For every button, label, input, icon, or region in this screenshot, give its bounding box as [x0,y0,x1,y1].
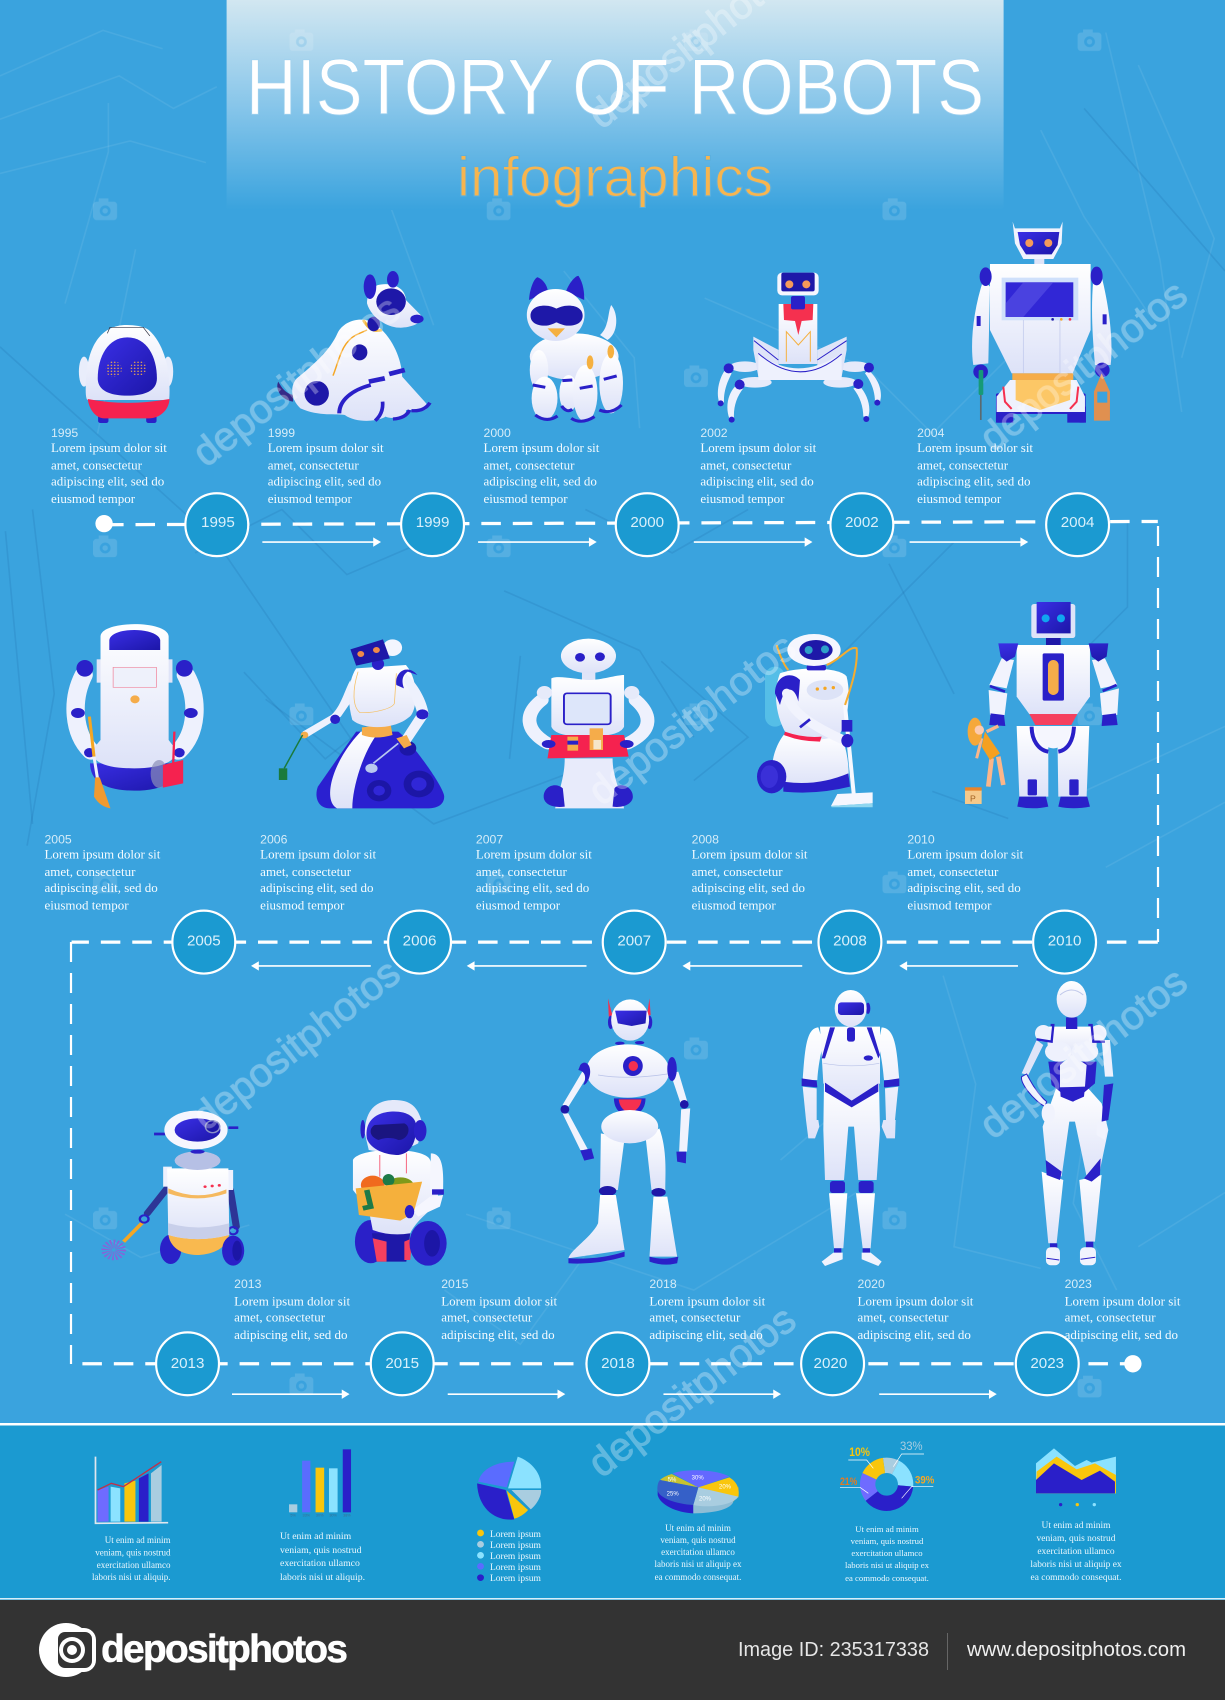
node 1995 [185,493,248,556]
chart: donut [840,1439,934,1506]
node 2002: 2002 [845,514,879,531]
chart: column bars [289,1449,351,1518]
text: chart 2: laboris nisi ut aliquip. [280,1572,365,1583]
caption 2018 [649,1277,766,1342]
caption 2000: adipiscing elit, sed do [484,474,597,489]
caption 2000: eiusmod tempor [484,491,568,506]
website: www.depositphotos.com [966,1639,1186,1661]
chart: donut: 39% [915,1474,934,1486]
watermarks: depositphotos [971,272,1195,460]
text: chart 6: ea commodo consequat. [1031,1573,1121,1583]
robot 2002: spider [718,273,881,423]
robot 2008: mop [757,634,873,807]
caption 2015: 2015 [441,1277,469,1291]
text: chart 6 [1030,1521,1122,1583]
caption 2018: amet, consectetur [649,1310,741,1325]
watermarks: depositphotos [580,1297,804,1486]
image id: Image ID: 235317338 [738,1639,929,1661]
text: chart 6: exercitation ullamco [1037,1547,1115,1557]
caption 2007: eiusmod tempor [476,898,561,913]
caption 2010: amet, consectetur [907,864,999,879]
text: chart 5: exercitation ullamco [851,1548,923,1558]
chart: column bars: 30% [316,1514,324,1518]
caption 2023 [1065,1277,1181,1342]
caption 1995 [51,426,167,506]
caption 2020: adipiscing elit, sed do [858,1327,971,1342]
node 2004: 2004 [1061,514,1094,531]
caption 2000: 2000 [484,426,511,440]
node 2000: 2000 [630,514,664,531]
caption 2007 [476,832,592,913]
caption 2010: adipiscing elit, sed do [907,880,1021,895]
text: chart 4 [654,1523,742,1582]
node 2020: 2020 [814,1355,847,1372]
watermarks: depositphotos [184,287,408,475]
caption 2000 [484,426,600,506]
node 2007: 2007 [617,932,651,949]
caption 2018: adipiscing elit, sed do [649,1327,763,1342]
watermarks [184,0,1195,1486]
caption 2007: adipiscing elit, sed do [476,880,589,895]
chart: column bars: 38% [343,1514,351,1518]
node 2023: 2023 [1030,1355,1064,1372]
caption 2008: adipiscing elit, sed do [692,880,805,895]
text: chart 6: laboris nisi ut aliquip ex [1030,1560,1122,1570]
text: chart 4: veniam, quis nostrud [660,1535,736,1545]
timeline: row 3 [82,1332,1142,1397]
text: chart 4: exercitation ullamco [661,1547,735,1557]
watermarks: depositphotos [184,950,408,1139]
caption 2007: amet, consectetur [476,864,568,879]
caption 2005 [44,832,161,913]
caption 2004 [917,426,1033,506]
caption 2004: adipiscing elit, sed do [917,474,1031,489]
timeline: row 1 [95,493,1158,556]
caption 2018: Lorem ipsum dolor sit [649,1293,766,1308]
text: chart 4: laboris nisi ut aliquip ex [654,1559,742,1569]
caption 2010: eiusmod tempor [907,898,992,913]
node 2006 [388,911,451,974]
caption 1995: Lorem ipsum dolor sit [51,440,167,455]
caption 1999: adipiscing elit, sed do [268,474,381,489]
node 2013: 2013 [171,1355,204,1372]
caption 2002: eiusmod tempor [700,491,785,506]
chart: 3D pie: 30% [692,1475,704,1481]
chart: area [1036,1448,1116,1506]
caption 2023: 2023 [1065,1277,1092,1291]
node 2018 [586,1332,649,1395]
robot 2004: worker [972,222,1112,423]
chart: pie with legend [477,1457,541,1581]
captions row 3 [234,1277,1181,1342]
text: chart 5: laboris nisi ut aliquip ex [845,1560,930,1570]
text: chart 5: ea commodo consequat. [845,1573,929,1583]
node 1995: 1995 [201,514,235,531]
node 1999 [401,493,464,556]
node 2000 [616,493,679,556]
robot 2020: android [802,990,899,1266]
robot 2006: tracked [279,639,444,808]
subtitle: infographics [457,145,773,208]
chart: column bars: 5% [290,1514,297,1518]
caption 2006: Lorem ipsum dolor sit [260,847,376,862]
caption 2013: amet, consectetur [234,1310,326,1325]
legend: pie: Lorem ipsum [490,1574,542,1584]
robot 2018: humanoid [561,998,690,1265]
caption 2004: eiusmod tempor [917,491,1002,506]
chart: donut: 33% [900,1439,923,1453]
text: chart 4: ea commodo consequat. [655,1572,741,1582]
title: HISTORY OF ROBOTS [246,42,984,131]
robot 1999: dog [277,271,430,421]
timeline: connector left [70,942,72,1364]
node 2002 [830,493,893,556]
caption 2008 [692,832,808,913]
text: chart 5: Ut enim ad minim [855,1524,919,1534]
panel: header gradient [227,0,1004,210]
footer bar [0,1600,1225,1700]
caption 2005: Lorem ipsum dolor sit [44,847,161,862]
text: chart 2: exercitation ullamco [280,1558,360,1569]
caption 2015: adipiscing elit, sed do [441,1327,555,1342]
node 2006: 2006 [403,932,436,949]
caption 2005: eiusmod tempor [44,898,129,913]
chart: 3D pie: 25% [667,1492,679,1498]
caption 2004: amet, consectetur [917,457,1009,472]
text: chart 1: exercitation ullamco [97,1560,171,1570]
caption 2005: 2005 [44,832,72,846]
legend: pie: Lorem ipsum [490,1541,542,1551]
caption 2023: Lorem ipsum dolor sit [1065,1293,1181,1308]
arrows row 3 [232,1391,995,1397]
caption 2015: Lorem ipsum dolor sit [441,1293,558,1308]
text: chart 4: Ut enim ad minim [665,1523,731,1533]
logo wordmark: depositphotos [101,1628,348,1671]
caption 2002: 2002 [700,426,728,440]
caption 2013 [234,1277,350,1342]
caption 2002: amet, consectetur [700,457,792,472]
legend: pie [490,1530,542,1584]
caption 2008: 2008 [692,832,719,846]
panel: bottom charts [0,1423,1225,1600]
text: chart 2 [280,1531,365,1583]
caption 2006: amet, consectetur [260,864,352,879]
robot 1995 [79,325,173,423]
node 1999: 1999 [416,514,449,531]
node 2015 [371,1332,434,1395]
robot 2010: tall with girl [965,602,1119,808]
legend: pie: Lorem ipsum [490,1563,542,1573]
text: chart 5 [845,1524,930,1583]
caption 1995: 1995 [51,426,78,440]
text: chart 1: Ut enim ad minim [105,1535,170,1545]
legend: pie: Lorem ipsum [490,1552,542,1562]
caption 2007: 2007 [476,832,503,846]
chart: donut: 21% [840,1476,857,1488]
node 2005 [172,911,235,974]
caption 1995: amet, consectetur [51,457,143,472]
timeline: connector right [1157,526,1159,942]
text: chart 2: veniam, quis nostrud [280,1545,362,1556]
caption 2004: 2004 [917,426,945,440]
caption 2023: amet, consectetur [1065,1310,1156,1325]
caption 2010: 2010 [907,832,935,846]
node 2020 [801,1332,864,1395]
text: chart 5: veniam, quis nostrud [851,1536,924,1546]
caption 2007: Lorem ipsum dolor sit [476,847,592,862]
chart: donut: 10% [849,1445,870,1459]
node 2007 [603,911,666,974]
caption 2005: amet, consectetur [44,864,136,879]
caption 2000: Lorem ipsum dolor sit [484,440,600,455]
robot 2005: cleaner [71,624,198,808]
text: chart 1 [92,1535,171,1582]
caption 2010: Lorem ipsum dolor sit [907,847,1024,862]
caption 2002: adipiscing elit, sed do [700,474,814,489]
caption 2018: 2018 [649,1277,677,1291]
node 2018: 2018 [601,1355,635,1372]
watermarks: depositphotos [971,959,1195,1148]
caption 2020: 2020 [858,1277,885,1291]
captions row 2 [44,832,1024,913]
node 2010: 2010 [1048,932,1081,949]
caption 2023: adipiscing elit, sed do [1065,1327,1178,1342]
icon: camera logo [39,1623,96,1677]
caption 2013: Lorem ipsum dolor sit [234,1293,350,1308]
caption 1999: 1999 [268,426,295,440]
caption 2006 [260,832,376,913]
chart: 3D pie: 20% [719,1484,732,1490]
robot 2007: waiter [529,639,648,808]
node 2004 [1046,493,1109,556]
caption 2015 [441,1277,558,1342]
caption 2006: 2006 [260,832,288,846]
caption 2004: Lorem ipsum dolor sit [917,440,1033,455]
caption 1999 [268,426,384,506]
caption 2020: Lorem ipsum dolor sit [858,1293,974,1308]
text: chart 2: Ut enim ad minim [280,1531,352,1542]
arrows row 2 [253,963,1018,969]
node 2015: 2015 [385,1355,419,1372]
caption 2008: eiusmod tempor [692,898,776,913]
chart: 3D pie [657,1470,739,1513]
watermarks: depositphotos [580,625,804,814]
caption 2020: amet, consectetur [858,1310,949,1325]
node 2008 [818,911,881,974]
node 2005: 2005 [187,932,221,949]
robot 2013: duster [107,1111,244,1266]
node 2013 [156,1332,219,1395]
caption 1999: eiusmod tempor [268,491,353,506]
caption 2013: 2013 [234,1277,262,1291]
caption 1995: eiusmod tempor [51,491,136,506]
legend: pie: Lorem ipsum [490,1530,542,1540]
chart: 3D pie: 20% [699,1497,712,1503]
robot 2015: basket [353,1100,447,1266]
caption 2000: amet, consectetur [484,457,575,472]
caption 1999: Lorem ipsum dolor sit [268,440,384,455]
caption 2013: adipiscing elit, sed do [234,1327,348,1342]
chart: rising bars [95,1457,168,1523]
caption 2008: amet, consectetur [692,864,783,879]
text: chart 1: veniam, quis nostrud [95,1548,171,1558]
caption 2015: amet, consectetur [441,1310,533,1325]
node 2023 [1016,1332,1079,1395]
robot 2023: gynoid [1022,981,1113,1265]
caption 2020 [858,1277,974,1342]
text: chart 6: veniam, quis nostrud [1037,1534,1116,1544]
robot 2010: tall with girl: P [970,794,976,804]
node 2010 [1033,911,1096,974]
caption 2005: adipiscing elit, sed do [44,880,158,895]
caption 2006: eiusmod tempor [260,898,345,913]
chart: column bars: 33% [302,1514,311,1518]
timeline: row 2 [72,911,1158,974]
caption 2002 [700,426,817,506]
caption 1999: amet, consectetur [268,457,359,472]
caption 2006: adipiscing elit, sed do [260,880,374,895]
caption 2002: Lorem ipsum dolor sit [700,440,817,455]
caption 2008: Lorem ipsum dolor sit [692,847,808,862]
chart: column bars: 30% [329,1514,338,1518]
node 2008: 2008 [833,932,867,949]
caption 1995: adipiscing elit, sed do [51,474,164,489]
text: chart 6: Ut enim ad minim [1042,1521,1111,1531]
text: chart 1: laboris nisi ut aliquip. [92,1572,170,1582]
chart: 3D pie: 5% [668,1478,677,1484]
captions row 1 [51,426,1033,506]
arrows row 1 [262,539,1027,545]
caption 2010 [907,832,1024,913]
robot 2000: cat [527,276,623,422]
